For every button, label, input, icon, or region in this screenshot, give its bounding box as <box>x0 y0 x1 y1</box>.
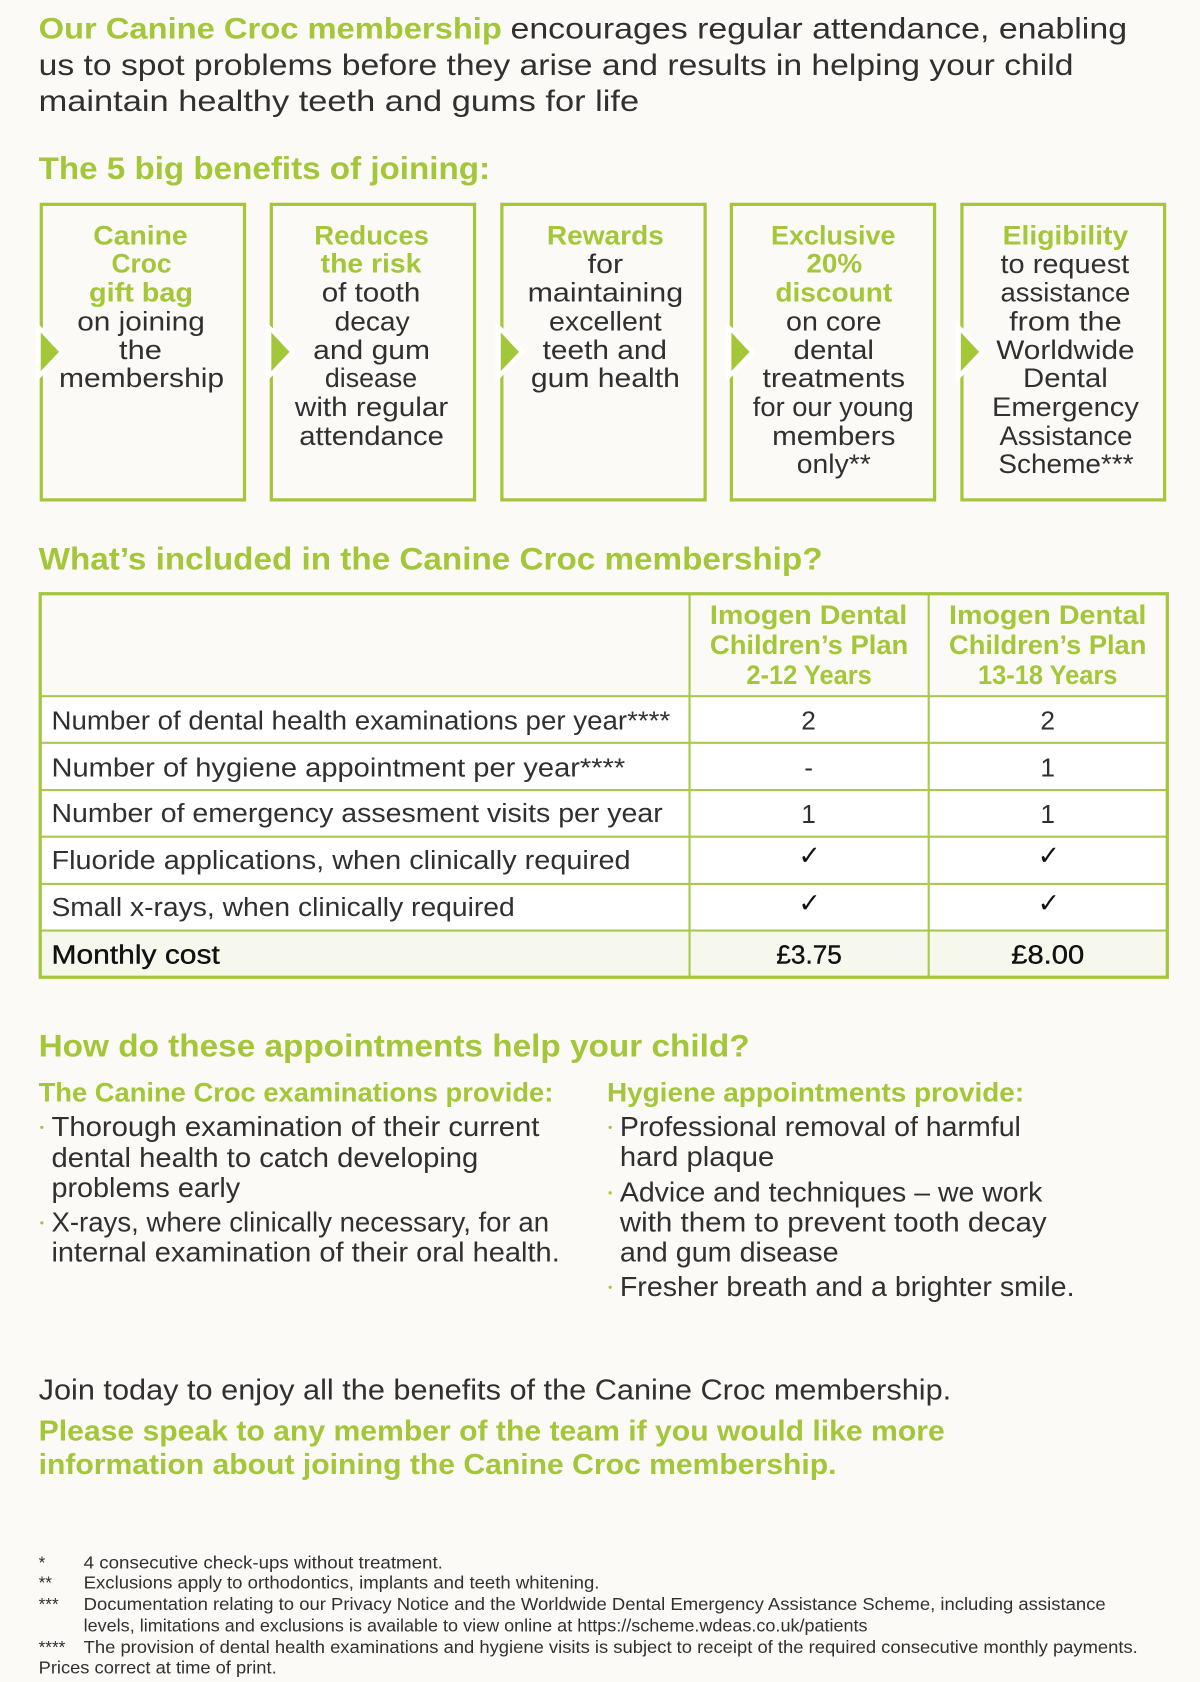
row: examinations: Number of dental health examinations per year**** <box>51 705 670 735</box>
intro text block: Our Canine Croc membership <box>39 13 502 46</box>
panel: benefit 1 <box>35 204 245 500</box>
panel: benefit 5: Dental <box>1023 363 1108 393</box>
panel: benefit 4: for our young <box>753 392 914 422</box>
row: monthly cost <box>51 939 1084 969</box>
intro text block <box>39 13 1127 118</box>
footnotes: The provision of dental health examinations and hygiene visits is subject to receipt of the required consecutive monthly payments. <box>84 1637 1138 1657</box>
panel: benefit 2: disease <box>325 363 417 393</box>
panel: benefit 4 <box>725 204 935 500</box>
panel: benefit 2: of tooth <box>322 277 420 307</box>
row: emergency: 1 <box>1040 799 1055 829</box>
bullet list: hygiene: Fresher breath and a brighter smile. <box>620 1271 1075 1302</box>
column header: 13-18 years <box>949 600 1146 690</box>
bullet list: hygiene: and gum disease <box>620 1236 839 1268</box>
row: hygiene: Number of hygiene appointment per year**** <box>51 753 625 783</box>
call to action: information about joining the Canine Croc membership. <box>39 1449 836 1481</box>
row: x-rays: ✓ <box>1038 888 1060 919</box>
column header: 13-18 years: Imogen Dental <box>949 600 1146 630</box>
row: monthly cost: £3.75 <box>776 939 842 969</box>
footnotes: Documentation relating to our Privacy Notice and the Worldwide Dental Emergency Assistance Scheme, including assistance <box>84 1594 1106 1614</box>
row: hygiene <box>51 753 1055 783</box>
column header: 13-18 years: Children’s Plan <box>949 630 1146 660</box>
panel: benefit 5: from the <box>1009 306 1122 336</box>
column: hygiene <box>607 1078 1075 1302</box>
column header: 2-12 years: 2-12 Years <box>746 660 872 690</box>
row: fluoride: Fluoride applications, when clinically required <box>51 845 631 875</box>
column: examinations <box>39 1078 560 1268</box>
footnotes: ** <box>39 1573 52 1593</box>
column header: 2-12 years: Children’s Plan <box>710 630 908 660</box>
panel: benefit 5: assistance <box>1001 277 1130 307</box>
panel: benefit 3: for <box>588 249 623 279</box>
heading: benefits: The 5 big benefits of joining: <box>39 151 490 186</box>
row: emergency: Number of emergency assesment visits per year <box>51 798 663 828</box>
row: examinations: 2 <box>1040 705 1055 735</box>
panel: benefit 3: maintaining <box>528 277 683 307</box>
intro text block: encourages regular attendance, enabling <box>510 13 1127 46</box>
footnotes: levels, limitations and exclusions is available to view online at https://scheme.wdeas.co.uk/patients <box>84 1616 868 1636</box>
footnotes: Prices correct at time of print. <box>39 1657 277 1677</box>
intro text block: maintain healthy teeth and gums for life <box>39 85 639 118</box>
footnotes: **** <box>39 1637 66 1657</box>
bullet list: examinations: Thorough examination of their current <box>51 1111 540 1142</box>
row: x-rays <box>51 888 1060 922</box>
bullet list: examinations: X-rays, where clinically necessary, for an <box>51 1206 549 1237</box>
panel: benefit 2: the risk <box>321 248 422 278</box>
footnotes: *** <box>39 1594 59 1614</box>
panel: benefit 2: attendance <box>299 421 444 451</box>
bullet list: examinations <box>40 1111 560 1268</box>
subheading: examinations: The Canine Croc examinations provide: <box>39 1078 553 1108</box>
heading: what's included: What’s included in the Canine Croc membership? <box>39 542 823 577</box>
call to action: Join today to enjoy all the benefits of the Canine Croc membership. <box>39 1374 951 1406</box>
panel: benefit 5: Eligibility <box>1003 221 1128 251</box>
intro text block: us to spot problems before they arise and results in helping your child <box>39 49 1073 82</box>
panel: benefit 5: Assistance <box>999 421 1132 451</box>
bullet list: hygiene: Professional removal of harmful <box>620 1111 1021 1142</box>
panel: benefit 4: members <box>772 421 895 451</box>
panel: benefit 4: treatments <box>762 363 905 393</box>
panel: benefit 3: gum health <box>531 363 680 393</box>
subheading: hygiene: Hygiene appointments provide: <box>607 1078 1024 1108</box>
row: examinations <box>51 705 1055 735</box>
bullet list: examinations: internal examination of their oral health. <box>51 1236 560 1268</box>
bullet list: hygiene: with them to prevent tooth decay <box>619 1206 1047 1237</box>
panel: benefit 1: on joining <box>77 306 205 336</box>
panel: benefit 2: and gum <box>313 335 430 365</box>
bullet list: hygiene: hard plaque <box>620 1141 774 1172</box>
panel: benefit 5: Scheme*** <box>998 449 1134 479</box>
row: emergency <box>51 798 1055 829</box>
row: hygiene: - <box>804 753 813 783</box>
panel: benefit 2 <box>265 204 475 500</box>
membership table <box>40 593 1168 977</box>
panel: benefit 3: Rewards <box>547 221 664 251</box>
row: monthly cost: Monthly cost <box>51 939 221 969</box>
panel: benefit 5: to request <box>1001 249 1130 279</box>
panel: benefit 4: only** <box>797 449 871 479</box>
row: x-rays: ✓ <box>798 888 821 919</box>
panel: benefit 2: with regular <box>294 392 448 422</box>
row: fluoride: ✓ <box>798 841 821 872</box>
panel: benefit 2: Reduces <box>314 221 429 251</box>
panel: benefit 1: the <box>119 335 162 365</box>
panel: benefit 5 <box>955 204 1165 500</box>
panel: benefit 1: membership <box>59 363 224 393</box>
heading: how appointments help: How do these appointments help your child? <box>39 1029 750 1064</box>
panel: benefit 5: Emergency <box>992 392 1140 422</box>
panel: benefit 5: Worldwide <box>996 335 1135 365</box>
panel: benefit 1: gift bag <box>89 277 193 307</box>
row: fluoride: ✓ <box>1038 841 1060 872</box>
row: hygiene: 1 <box>1040 753 1055 783</box>
panel: benefit 1: Canine <box>93 221 188 251</box>
call to action: Please speak to any member of the team if you would like more <box>39 1416 945 1448</box>
panel: benefit 1: Croc <box>112 248 172 278</box>
footnotes <box>39 1552 1138 1677</box>
panel: benefit 4: 20% <box>806 248 862 278</box>
footnotes: 4 consecutive check-ups without treatment. <box>84 1552 443 1572</box>
bullet list: hygiene: Advice and techniques – we work <box>620 1176 1042 1207</box>
bullet list: examinations: problems early <box>51 1172 240 1203</box>
bullet list: examinations: dental health to catch developing <box>51 1142 478 1173</box>
panel: benefit 4: on core <box>786 306 882 336</box>
panel: benefit 3 <box>495 204 705 500</box>
column header: 2-12 years <box>710 600 908 690</box>
panel: benefit 4: dental <box>794 335 874 365</box>
bullet list: hygiene <box>609 1111 1075 1302</box>
column header: 2-12 years: Imogen Dental <box>710 600 907 630</box>
row: emergency: 1 <box>801 799 816 829</box>
panel: benefit 2: decay <box>335 306 410 336</box>
panel: benefit 4: discount <box>775 277 892 307</box>
panel: benefit 3: excellent <box>549 306 662 336</box>
column header: 13-18 years: 13-18 Years <box>978 660 1117 690</box>
panel: benefit 3: teeth and <box>543 335 667 365</box>
panel: benefit 4: Exclusive <box>771 221 895 251</box>
row: fluoride <box>51 841 1060 875</box>
row: monthly cost: £8.00 <box>1011 939 1084 969</box>
footnotes: * <box>39 1552 46 1572</box>
row: x-rays: Small x-rays, when clinically required <box>51 892 515 922</box>
row: examinations: 2 <box>801 705 816 735</box>
call to action <box>39 1374 951 1481</box>
footnotes: Exclusions apply to orthodontics, implants and teeth whitening. <box>84 1573 599 1593</box>
